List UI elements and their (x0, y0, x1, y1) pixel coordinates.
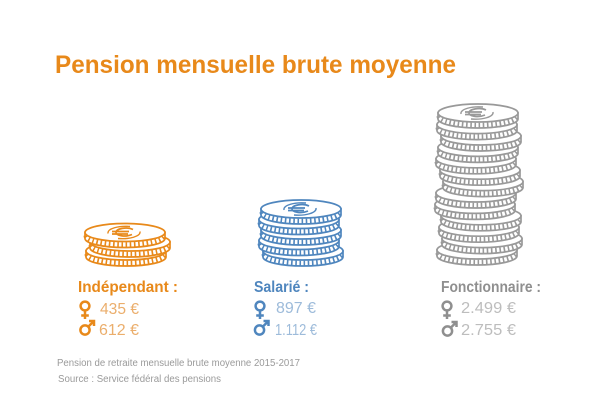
panel: Salarié (254, 200, 343, 339)
male pension value: 1.112 € (275, 322, 317, 339)
female pension value: 435 € (100, 301, 139, 318)
panel: Indépendant (78, 224, 178, 339)
icon: orange coin stack (85, 224, 170, 266)
title: Pension mensuelle brute moyenne (55, 51, 456, 79)
female pension value: 897 € (276, 300, 316, 317)
icon: grey coin stack (435, 104, 523, 265)
footnote: Source : Service fédéral des pensions (58, 374, 221, 385)
icon: male symbol (443, 322, 456, 336)
panel: Fonctionnaire (435, 104, 541, 339)
icon: male symbol (255, 321, 268, 335)
icon: female symbol (443, 302, 451, 319)
male pension value: 2.755 € (461, 322, 516, 339)
male pension value: 612 € (99, 322, 139, 339)
heading: Indépendant: Indépendant : (78, 279, 178, 296)
female pension value: 2.499 € (461, 300, 516, 317)
icon: blue coin stack (259, 200, 343, 266)
heading: Salarié: Salarié : (254, 279, 309, 296)
icon: female symbol (81, 302, 89, 319)
icon: female symbol (256, 302, 264, 319)
heading: Fonctionnaire: Fonctionnaire : (441, 279, 541, 296)
footnote: Pension de retraite mensuelle brute moyenne 2015-2017 (57, 358, 300, 369)
icon: male symbol (80, 321, 94, 335)
footnote (57, 358, 300, 385)
